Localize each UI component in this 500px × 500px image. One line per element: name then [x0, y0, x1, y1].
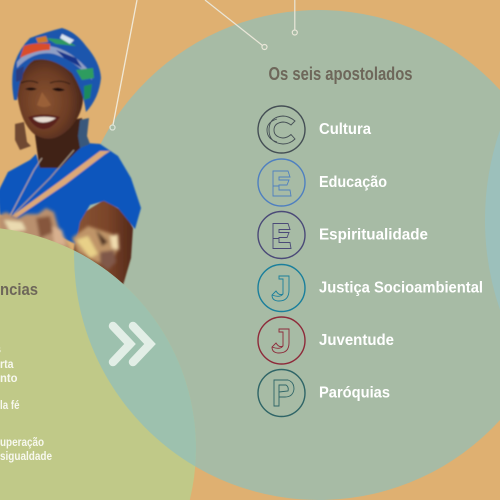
list item: Juventude	[258, 317, 394, 364]
label: Paróquias: Paróquias	[319, 384, 390, 402]
connector line: right	[292, 0, 297, 35]
icon: E badge	[258, 159, 305, 206]
label: Espiritualidade: Espiritualidade	[319, 226, 428, 244]
text block: left panel list (cut off at the edge): rta	[0, 357, 14, 371]
panel: overlap lens between green and sage circles	[74, 250, 196, 466]
list item: Cultura	[258, 106, 371, 153]
label: Justiça Socioambiental: Justiça Socioambiental	[319, 280, 483, 296]
list item: Educação	[258, 159, 387, 206]
icon: C badge	[258, 106, 305, 153]
photo: woman with blue dress and turban	[0, 28, 141, 292]
label: Educação: Educação	[319, 174, 387, 191]
panel: left green circle	[0, 228, 196, 500]
connector line: left	[110, 0, 137, 130]
text block: left panel list (cut off at the edge): la fé	[0, 398, 20, 412]
list item: Paróquias	[258, 370, 390, 416]
text block: left panel list (cut off at the edge): sigualdade	[0, 449, 52, 463]
list item: Espiritualidade	[258, 212, 428, 258]
label: Cultura: Cultura	[319, 121, 371, 138]
connector line: middle	[205, 0, 267, 50]
text block: left panel list (cut off at the edge)	[0, 342, 52, 463]
panel: right teal circle segment	[485, 130, 500, 310]
list item: Justiça Socioambiental	[258, 264, 483, 312]
icon: J badge	[258, 317, 305, 364]
icon: P badge	[258, 370, 305, 416]
heading: left panel (cut off at the edge): ncias	[0, 280, 38, 299]
arrow: double chevron	[113, 326, 150, 362]
icon: J badge	[258, 264, 305, 312]
text block: left panel list (cut off at the edge): uperação	[0, 435, 44, 449]
label: Juventude: Juventude	[319, 332, 394, 349]
icon: E badge	[258, 212, 305, 258]
heading: Os seis apostolados: Os seis apostolados	[268, 64, 412, 84]
text block: left panel list (cut off at the edge): nto	[0, 371, 18, 385]
